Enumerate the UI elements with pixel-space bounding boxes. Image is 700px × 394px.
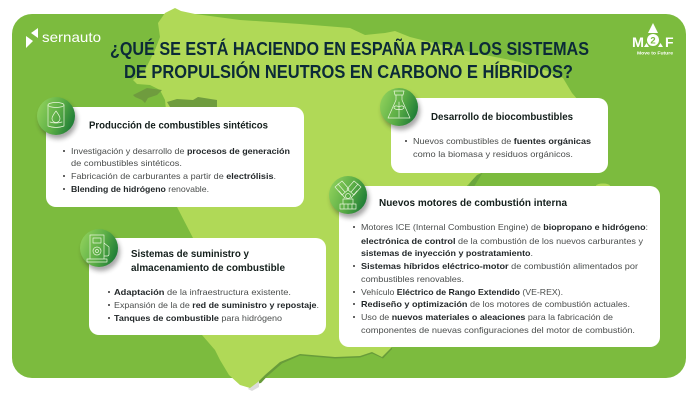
heading: Producción de combustibles sintéticos xyxy=(89,120,268,132)
bullet list: combustibles renovables. xyxy=(361,274,464,284)
bullet list xyxy=(405,136,591,159)
northern relief patches xyxy=(133,88,217,107)
heading: Sistemas de suministro y xyxy=(131,249,249,260)
bullet list: electrónica de control de la combustión de los nuevos carburantes y xyxy=(361,236,644,246)
eastern islands patch xyxy=(596,184,610,188)
sernauto wordmark: sernauto xyxy=(42,29,101,45)
map south shadow xyxy=(256,340,392,384)
bullet list: Expansión de la de red de suministro y repostaje . xyxy=(114,300,319,310)
panel: biocombustibles xyxy=(380,88,608,173)
bullet list: sistemas de inyección y postratamiento . xyxy=(361,248,533,258)
bullet list: Blending de hidrógeno renovable. xyxy=(71,184,209,194)
bullet list: Nuevos combustibles de fuentes orgánicas xyxy=(413,136,591,146)
icon: sernauto arrows xyxy=(26,28,38,48)
icon: flask with plant xyxy=(380,88,420,130)
heading xyxy=(131,249,285,274)
icon: triangle xyxy=(648,23,658,33)
bullet list xyxy=(353,222,648,335)
bullet list: Uso de nuevos materiales o aleaciones para la fabricación de xyxy=(361,312,613,322)
panel: combustibles sintéticos xyxy=(37,97,304,207)
logo: sernauto xyxy=(26,28,101,48)
map tip shadow xyxy=(248,378,259,391)
bullet list: Tanques de combustible para hidrógeno xyxy=(114,313,282,323)
title: DE PROPULSIÓN NEUTROS EN CARBONO E HÍBRIDOS? xyxy=(124,61,573,82)
bullet list: Vehículo Eléctrico de Rango Extendido (VE-REX). xyxy=(361,287,563,297)
bullet list xyxy=(63,146,290,194)
heading: Desarrollo de biocombustibles xyxy=(431,112,573,123)
bullet list: Motores ICE (Internal Combustion Engine) de biopropano e hidrógeno : xyxy=(361,222,648,232)
bullet list xyxy=(108,287,319,323)
logo: Move to Future: 2 xyxy=(650,36,656,46)
logo: Move to Future xyxy=(632,23,674,56)
title xyxy=(110,38,589,82)
bullet list: Investigación y desarrollo de procesos de generación xyxy=(71,146,290,156)
title: ¿QUÉ SE ESTÁ HACIENDO EN ESPAÑA PARA LOS SISTEMAS xyxy=(110,38,589,59)
bullet list: como la biomasa y residuos orgánicos. xyxy=(413,149,573,159)
map of Spain xyxy=(133,8,610,391)
M letter: M xyxy=(632,34,644,50)
icon: fuel pump xyxy=(80,229,120,271)
map silhouette xyxy=(133,8,578,388)
map east shadow xyxy=(466,172,483,190)
panel: nuevos motores xyxy=(329,176,660,347)
F letter: F xyxy=(665,34,674,50)
bullet list: Rediseño y optimización de los motores de combustión actuales. xyxy=(361,299,630,309)
bullet list: componentes de nuevas configuraciones del motor de combustión. xyxy=(361,325,635,335)
bullet list: Fabricación de carburantes a partir de electrólisis . xyxy=(71,171,276,181)
heading: almacenamiento de combustible xyxy=(131,263,285,274)
bullet list: de combustibles sintéticos. xyxy=(71,158,182,168)
heading: Nuevos motores de combustión interna xyxy=(379,198,567,209)
icon: engine xyxy=(329,176,369,218)
icon: circled 2 xyxy=(647,34,659,46)
bullet list: Sistemas híbridos eléctrico-motor de combustión alimentados por xyxy=(361,261,638,271)
panel: suministro y almacenamiento xyxy=(80,229,326,335)
icon: small triangles xyxy=(644,43,663,47)
tagline: Move to Future xyxy=(637,50,674,56)
icon: fuel barrel xyxy=(37,97,77,139)
bullet list: Adaptación de la infraestructura existente. xyxy=(114,287,291,297)
